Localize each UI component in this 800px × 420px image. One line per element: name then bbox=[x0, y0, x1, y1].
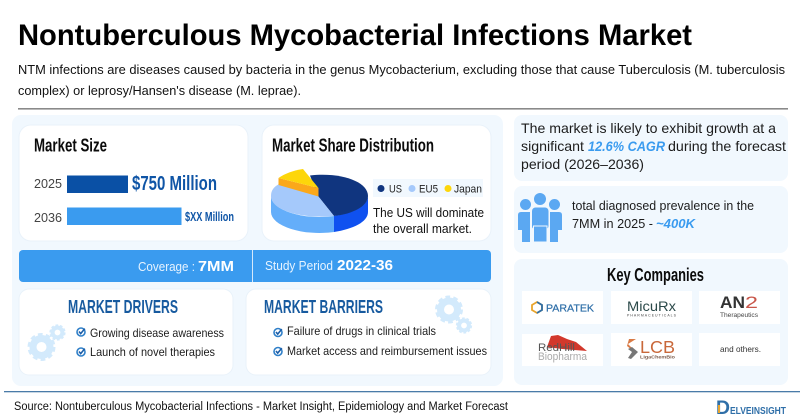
share note bbox=[373, 206, 484, 236]
panel: CAGR callout: 12.6% CAGR bbox=[588, 138, 666, 154]
legend bbox=[373, 179, 483, 197]
pie chart bbox=[271, 169, 368, 233]
coverage banner bbox=[19, 250, 491, 282]
logo: Paratek: PARATEK bbox=[546, 302, 594, 314]
heading: market share: Market Share Distribution bbox=[272, 134, 434, 156]
logo: LCB LigaChemBio bbox=[611, 333, 692, 366]
logo: RedHill Biopharma: Biopharma bbox=[538, 351, 588, 363]
icon: gears bbox=[30, 326, 64, 359]
logo: LCB LigaChemBio: LigaChemBio bbox=[640, 354, 675, 360]
driver list bbox=[77, 326, 224, 359]
study period: Study Period bbox=[265, 259, 333, 273]
panel: CAGR callout bbox=[514, 115, 788, 181]
panel: main background bbox=[12, 115, 503, 386]
panel: market barriers bbox=[246, 289, 491, 375]
logo: MicuRx bbox=[611, 291, 692, 324]
panel: CAGR callout: during the forecast bbox=[668, 138, 786, 154]
heading: market drivers: MARKET DRIVERS bbox=[68, 296, 178, 317]
coverage banner: 7MM bbox=[198, 259, 234, 275]
logo: AN2 Therapeutics: Therapeutics bbox=[720, 312, 759, 319]
barrier list: Failure of drugs in clinical trials bbox=[287, 324, 436, 338]
logo: AN2 Therapeutics: AN bbox=[720, 293, 745, 312]
panel: key companies bbox=[514, 259, 788, 385]
logo: LCB LigaChemBio: LCB bbox=[640, 337, 675, 357]
intro text bbox=[18, 62, 785, 98]
logo: RedHill Biopharma: RedHill bbox=[538, 342, 575, 354]
title: Nontuberculous Mycobacterial Infections Market bbox=[18, 19, 692, 52]
logo: DelveInsight: ELVEINSIGHT bbox=[730, 405, 786, 417]
panel: CAGR callout: significant bbox=[521, 138, 584, 154]
logo: DelveInsight: D bbox=[716, 398, 730, 419]
legend: EU5 bbox=[419, 184, 438, 196]
logo: and others bbox=[699, 333, 780, 366]
intro text: complex) or leprosy/Hansen's disease (M. leprae). bbox=[18, 83, 301, 98]
logo: AN2 Therapeutics bbox=[699, 291, 780, 324]
legend: US bbox=[389, 184, 402, 196]
panel: market drivers bbox=[19, 289, 233, 375]
logo: MicuRx: PHARMACEUTICALS bbox=[627, 314, 677, 318]
logo: DelveInsight bbox=[716, 398, 786, 419]
bar chart: market size: 2036 bbox=[34, 211, 62, 225]
barrier list bbox=[274, 324, 487, 358]
legend: Japan bbox=[454, 184, 482, 196]
bar chart: market size: $750 Million bbox=[132, 173, 217, 195]
heading: key companies: Key Companies bbox=[607, 264, 704, 285]
barrier list: Market access and reimbursement issues bbox=[287, 344, 487, 358]
prevalence text: ~400K bbox=[656, 216, 697, 231]
driver list: Launch of novel therapies bbox=[90, 345, 215, 359]
logo: and others: and others. bbox=[720, 344, 761, 354]
share note: the overall market. bbox=[373, 222, 472, 236]
prevalence text: 7MM in 2025 - bbox=[572, 216, 653, 231]
prevalence text bbox=[572, 198, 754, 231]
panel: prevalence callout bbox=[514, 186, 788, 253]
share note: The US will dominate bbox=[373, 206, 484, 220]
prevalence text: total diagnosed prevalence in the bbox=[572, 198, 754, 213]
logo: AN2 Therapeutics: 2 bbox=[745, 293, 758, 312]
bar chart: market size bbox=[34, 173, 234, 225]
driver list: Growing disease awareness bbox=[90, 326, 224, 340]
heading: market barriers: MARKET BARRIERS bbox=[264, 296, 383, 317]
bar chart: market size: 2025 bbox=[34, 177, 62, 191]
icon: people bbox=[518, 193, 562, 242]
logo: Paratek bbox=[522, 291, 603, 324]
panel: CAGR callout: The market is likely to exhibit growth at a bbox=[521, 120, 776, 136]
panel: market share distribution bbox=[262, 125, 491, 241]
panel: market size bbox=[19, 125, 248, 241]
logo: MicuRx: MicuRx bbox=[627, 298, 676, 314]
intro text: NTM infections are diseases caused by bacteria in the genus Mycobacterium, excluding those that cause Tuberculosis (M. tuberculosis bbox=[18, 62, 785, 77]
logo: RedHill Biopharma bbox=[522, 334, 603, 366]
source note: Source: Nontuberculous Mycobacterial Infections - Market Insight, Epidemiology and Market Forecast bbox=[14, 401, 509, 413]
heading: market size: Market Size bbox=[34, 134, 107, 156]
bar chart: market size: $XX Million bbox=[185, 210, 234, 224]
icon: gears bbox=[437, 298, 471, 332]
coverage banner: 2022-36 bbox=[337, 258, 393, 274]
panel: CAGR callout: period (2026–2036) bbox=[521, 156, 644, 172]
coverage: Coverage : bbox=[138, 260, 195, 274]
